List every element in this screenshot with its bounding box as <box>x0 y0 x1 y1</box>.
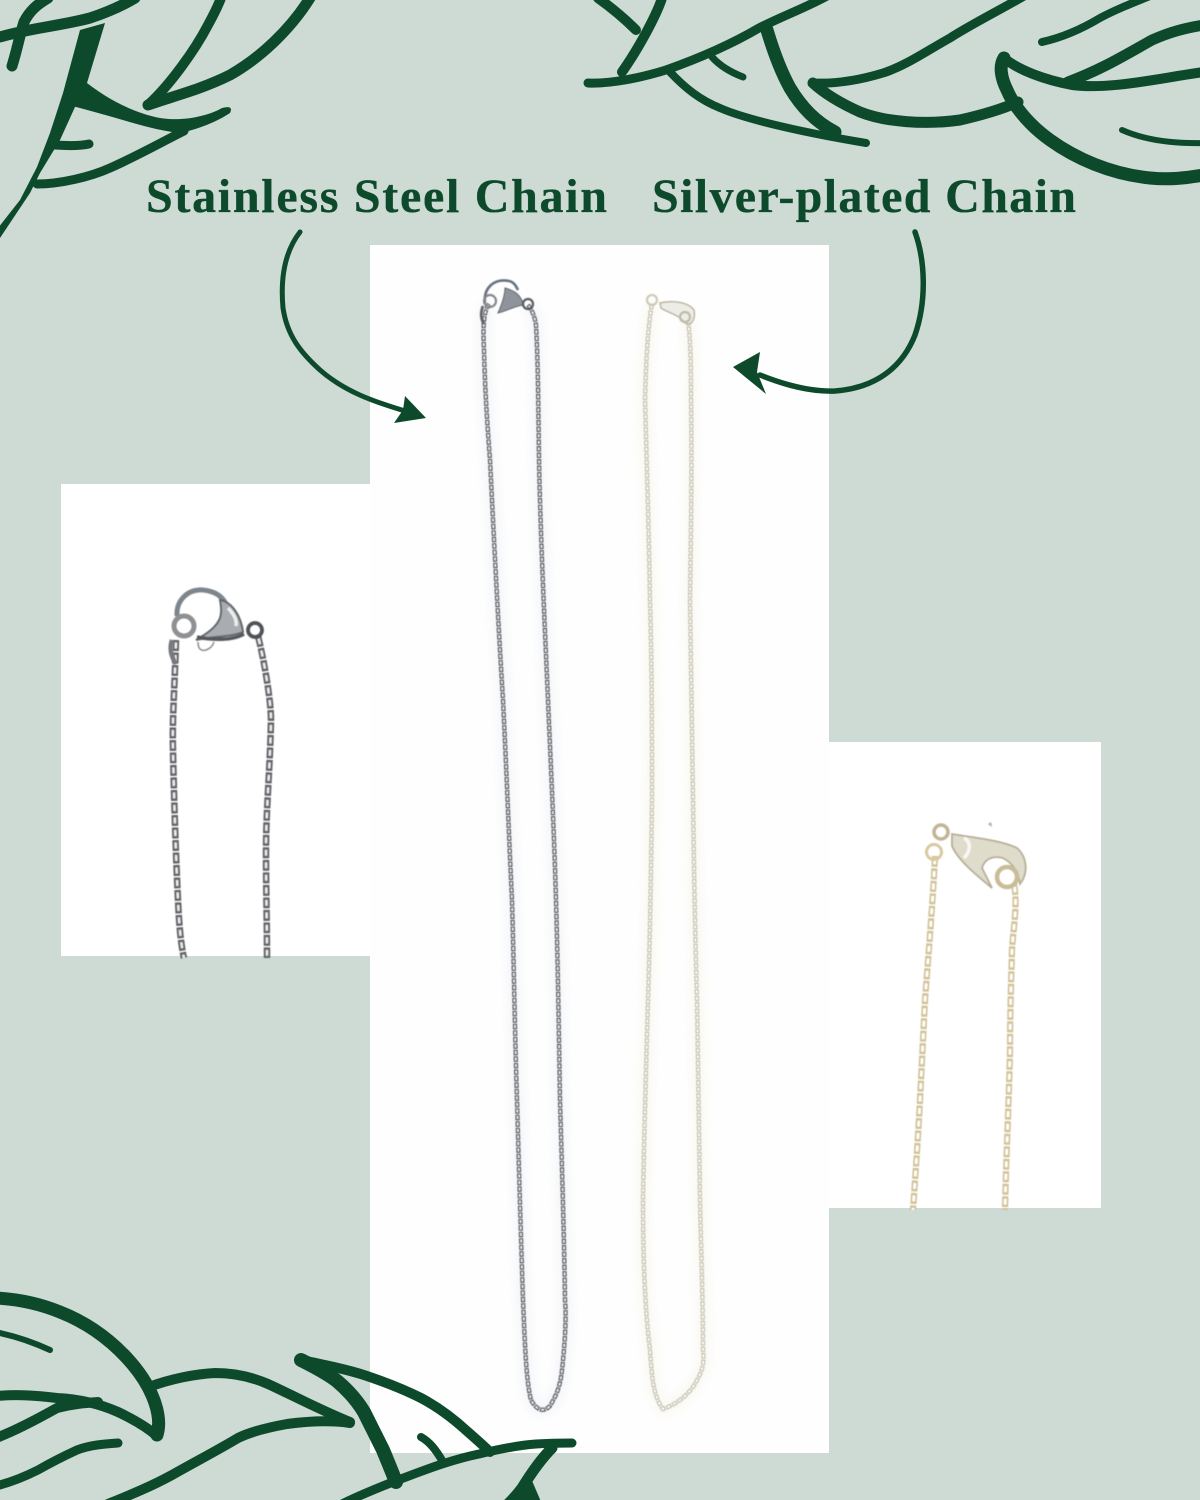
soft chain shadow <box>484 304 703 1410</box>
leaves: top-right corner <box>588 0 1200 179</box>
panel: main photo of both chains <box>370 245 829 1453</box>
chain: stainless close-up strands <box>173 636 271 958</box>
clasp: stainless small <box>481 280 533 324</box>
arrow: to silver-plated chain <box>733 232 923 394</box>
arrow: to stainless steel chain <box>282 232 426 423</box>
clasp: silver close-up <box>926 822 1026 888</box>
panel: stainless steel close-up photo <box>61 484 370 958</box>
leaves: top-left corner <box>0 0 310 238</box>
chain: silver-plated full length <box>643 304 703 1409</box>
chain: silver close-up strands <box>913 856 1016 1210</box>
heading: stainless steel chain label: Stainless Steel Chain <box>146 170 607 223</box>
clasp: silver small <box>647 295 694 324</box>
clasp: stainless close-up <box>171 590 262 664</box>
heading: silver-plated chain label: Silver-plated Chain <box>652 170 1076 223</box>
panel: silver-plated close-up photo <box>829 742 1101 1210</box>
leaves: bottom-left corner <box>0 1298 572 1500</box>
chain: stainless steel full length <box>484 304 566 1410</box>
